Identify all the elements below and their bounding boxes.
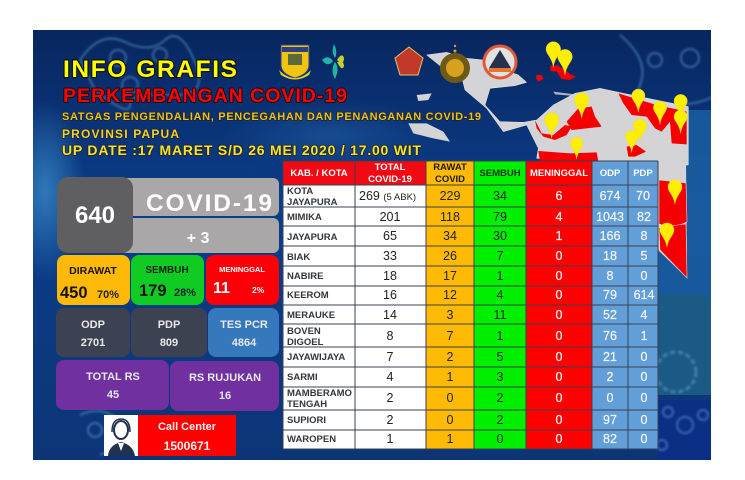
table header: ODP — [600, 168, 621, 179]
row: Waropen: 82 — [603, 432, 617, 446]
table header: KAB. / KOTA — [290, 168, 348, 179]
logo: POLRI emblem — [443, 45, 467, 80]
row: Biak: 33 — [383, 249, 397, 263]
logo: Papua shield — [279, 45, 311, 80]
row: Supiori — [287, 413, 648, 427]
row: Merauke: 11 — [494, 308, 507, 322]
icon: operator with headset — [104, 415, 138, 456]
row: Nabire: 1 — [497, 269, 504, 283]
stat: RS rujukan: RS RUJUKAN — [189, 372, 261, 384]
row: Mimika: 118 — [440, 210, 460, 224]
stat: total RS — [56, 360, 169, 410]
row: Kota Jayapura: 229 — [440, 189, 460, 203]
map: grey land — [427, 52, 688, 165]
logo: TNI emblem — [395, 47, 423, 75]
stat: RS rujukan: 16 — [219, 390, 231, 402]
row: Kota Jayapura: 269 (5 ABK) — [359, 189, 416, 203]
stat: meninggal: MENINGGAL — [219, 265, 265, 274]
row: Merauke: 14 — [383, 308, 397, 322]
row: Jayapura — [287, 229, 648, 243]
stat: dirawat: DIRAWAT — [69, 265, 117, 277]
row: Mamberamo Tengah — [287, 388, 648, 410]
row: Nabire: 8 — [607, 269, 614, 283]
row: Jayawijaya: 0 — [641, 350, 648, 364]
daily increase: + 3 — [187, 230, 209, 247]
row: Supiori: SUPIORI — [287, 415, 326, 426]
stat: total RS: 45 — [107, 389, 119, 401]
daily increase — [120, 218, 279, 253]
row: Waropen — [287, 432, 648, 446]
row: Keerom — [287, 288, 654, 302]
row: Sarmi: 4 — [387, 370, 394, 384]
row: Keerom: KEEROM — [287, 290, 329, 301]
stat: ODP: ODP — [81, 319, 105, 331]
row: Jayapura: 166 — [600, 229, 620, 243]
row: Kota Jayapura — [287, 186, 650, 208]
row: Biak: 26 — [443, 249, 457, 263]
row: Boven Digoel: DIGOEL — [287, 337, 324, 348]
row: Waropen: 0 — [641, 432, 648, 446]
stat: RS rujukan — [170, 361, 279, 411]
table header: TOTAL — [375, 162, 406, 173]
row: Merauke: 3 — [447, 308, 454, 322]
row: Keerom: 4 — [497, 288, 504, 302]
table column fills — [283, 161, 658, 449]
row: Biak: 5 — [641, 249, 648, 263]
row: Jayapura: 30 — [493, 229, 507, 243]
table header: RAWAT — [433, 162, 467, 173]
row: Sarmi — [287, 370, 648, 384]
row: Biak: 0 — [556, 249, 563, 263]
row: Jayawijaya — [287, 350, 648, 364]
row: Merauke — [287, 308, 648, 322]
row: Boven Digoel: 0 — [556, 329, 563, 343]
row: Boven Digoel: 1 — [497, 329, 504, 343]
total cases: 640 — [75, 202, 115, 229]
row: Jayawijaya: 0 — [556, 350, 563, 364]
row: Mamberamo Tengah: 0 — [556, 391, 563, 405]
row: Kota Jayapura: KOTA — [287, 186, 313, 197]
call center label — [138, 415, 236, 456]
row: Mamberamo Tengah: 0 — [607, 391, 614, 405]
row: Sarmi: 0 — [556, 370, 563, 384]
stat: tes PCR: 4864 — [232, 337, 257, 349]
row: Supiori: 0 — [447, 413, 454, 427]
stat: ODP — [56, 308, 130, 357]
row: Boven Digoel: BOVEN — [287, 326, 321, 337]
row: Nabire: 17 — [443, 269, 457, 283]
map: red regions — [550, 66, 576, 80]
row: Nabire — [287, 269, 648, 283]
row: Mimika: MIMIKA — [287, 212, 322, 223]
stat: sembuh — [131, 255, 204, 305]
stat: tes PCR: TES PCR — [220, 319, 268, 331]
table header: COVID-19 — [368, 174, 412, 185]
subtitle: task force: SATGAS PENGENDALIAN, PENCEGAHAN DAN PENANGANAN COVID-19 — [62, 111, 481, 123]
logo: Kemenkes — [322, 44, 344, 79]
stat: dirawat: 450 — [60, 284, 88, 302]
title block — [62, 56, 481, 158]
table grid — [283, 161, 658, 449]
row: Merauke: 0 — [556, 308, 563, 322]
row: Keerom: 79 — [603, 288, 617, 302]
row: Mamberamo Tengah: MAMBERAMO — [287, 388, 352, 399]
row: Waropen: WAROPEN — [287, 434, 336, 445]
row: Jayawijaya: 2 — [447, 350, 454, 364]
row: Jayapura: JAYAPURA — [287, 232, 338, 243]
call center label: Call Center — [158, 421, 217, 433]
row: Biak — [287, 249, 648, 263]
call center — [104, 415, 236, 456]
row: Supiori: 2 — [387, 413, 394, 427]
row: Supiori: 2 — [497, 413, 504, 427]
row: Sarmi: SARMI — [287, 372, 318, 383]
stat: ODP: 2701 — [81, 337, 105, 349]
stat: dirawat — [57, 255, 130, 305]
table header: COVID — [435, 174, 465, 185]
stat: dirawat: 70% — [97, 289, 119, 301]
row: Mamberamo Tengah: 2 — [497, 391, 504, 405]
row: Mamberamo Tengah: 2 — [387, 391, 394, 405]
row: Kota Jayapura: 70 — [636, 189, 650, 203]
row: Nabire: 0 — [556, 269, 563, 283]
row: Boven Digoel — [287, 326, 648, 348]
subtitle: province: PROVINSI PAPUA — [62, 127, 179, 141]
subtitle: PERKEMBANGAN COVID-19: PERKEMBANGAN COVID-19 — [63, 85, 347, 107]
row: Mimika: 79 — [493, 210, 507, 224]
row: Jayapura: 65 — [383, 229, 397, 243]
row: Biak: 18 — [603, 249, 617, 263]
row: Boven Digoel: 1 — [641, 329, 648, 343]
row: Jayawijaya: 21 — [603, 350, 617, 364]
row: Mamberamo Tengah: TENGAH — [287, 399, 327, 410]
row: Mamberamo Tengah: 0 — [447, 391, 454, 405]
row: Supiori: 0 — [556, 413, 563, 427]
row: Sarmi: 2 — [607, 370, 614, 384]
table header: MENINGGAL — [530, 168, 588, 179]
row: Kota Jayapura: JAYAPURA — [287, 197, 338, 208]
table header — [290, 162, 653, 185]
panel: COVID-19 total — [57, 177, 279, 253]
row: Sarmi: 3 — [497, 370, 504, 384]
row: Merauke: MERAUKE — [287, 310, 335, 321]
row: Waropen: 1 — [447, 432, 454, 446]
row: Jayapura: 1 — [556, 229, 563, 243]
table: cases by regency — [283, 161, 658, 449]
title: INFO GRAFIS: INFO GRAFIS — [63, 56, 237, 83]
table header: SEMBUH — [479, 168, 521, 179]
row: Jayawijaya: 5 — [497, 350, 504, 364]
stat: PDP — [131, 308, 207, 357]
stat: meninggal: 2% — [252, 285, 265, 295]
row: Keerom: 614 — [634, 288, 654, 302]
stat: sembuh: 179 — [139, 282, 167, 300]
row: Kota Jayapura: 674 — [600, 189, 620, 203]
row: Mimika: 1043 — [596, 210, 624, 224]
row: Supiori: 0 — [641, 413, 648, 427]
stat: sembuh: SEMBUH — [145, 265, 189, 276]
row: Jayapura: 34 — [443, 229, 457, 243]
row: Kota Jayapura: 6 — [556, 189, 563, 203]
row: Nabire: 18 — [383, 269, 397, 283]
stat: meninggal: 11 — [213, 280, 230, 297]
row: Keerom: 16 — [383, 288, 397, 302]
stat: PDP: 809 — [160, 337, 178, 349]
row: Nabire: NABIRE — [287, 271, 323, 282]
row: Jayawijaya: 7 — [387, 350, 394, 364]
row: Boven Digoel: 8 — [387, 329, 394, 343]
logo: BNPB — [484, 46, 516, 78]
row: Merauke: 4 — [641, 308, 648, 322]
row: Biak: 7 — [497, 249, 504, 263]
table header: PDP — [633, 168, 653, 179]
row: Biak: BIAK — [287, 252, 310, 263]
row: Mimika — [287, 210, 651, 224]
row: Mimika: 201 — [380, 210, 400, 224]
row: Mimika: 82 — [637, 210, 651, 224]
row: Waropen: 1 — [387, 432, 394, 446]
row: Supiori: 97 — [603, 413, 617, 427]
row: Boven Digoel: 76 — [603, 329, 617, 343]
stat: total RS: TOTAL RS — [86, 371, 140, 383]
stat: PDP: PDP — [158, 319, 180, 331]
row: Boven Digoel: 7 — [447, 329, 454, 343]
map of Papua — [408, 42, 688, 165]
row: Merauke: 52 — [603, 308, 617, 322]
row: Mamberamo Tengah: 0 — [641, 391, 648, 405]
call center label: 1500671 — [164, 439, 211, 453]
row: Jayapura: 8 — [641, 229, 648, 243]
stat: sembuh: 28% — [174, 287, 196, 299]
update date: UP DATE :17 MARET S/D 26 MEI 2020 / 17.00 WIT — [62, 142, 421, 158]
row: Mimika: 4 — [556, 210, 563, 224]
COVID-19 label: COVID-19 — [146, 190, 272, 217]
row: Kota Jayapura: 34 — [493, 189, 507, 203]
COVID-19 label — [120, 178, 279, 217]
logo row — [279, 44, 516, 80]
stat: meninggal — [206, 255, 279, 305]
row: Jayawijaya: JAYAWIJAYA — [287, 352, 345, 363]
row: Waropen: 0 — [497, 432, 504, 446]
row: Sarmi: 0 — [641, 370, 648, 384]
map: eastern strip beside table — [658, 160, 687, 278]
total cases — [57, 177, 133, 253]
stat: tes PCR — [208, 308, 279, 357]
row: Keerom: 12 — [443, 288, 457, 302]
row: Waropen: 0 — [556, 432, 563, 446]
map: yellow location pins — [544, 42, 687, 159]
row: Sarmi: 1 — [447, 370, 454, 384]
row: Keerom: 0 — [556, 288, 563, 302]
row: Nabire: 0 — [641, 269, 648, 283]
